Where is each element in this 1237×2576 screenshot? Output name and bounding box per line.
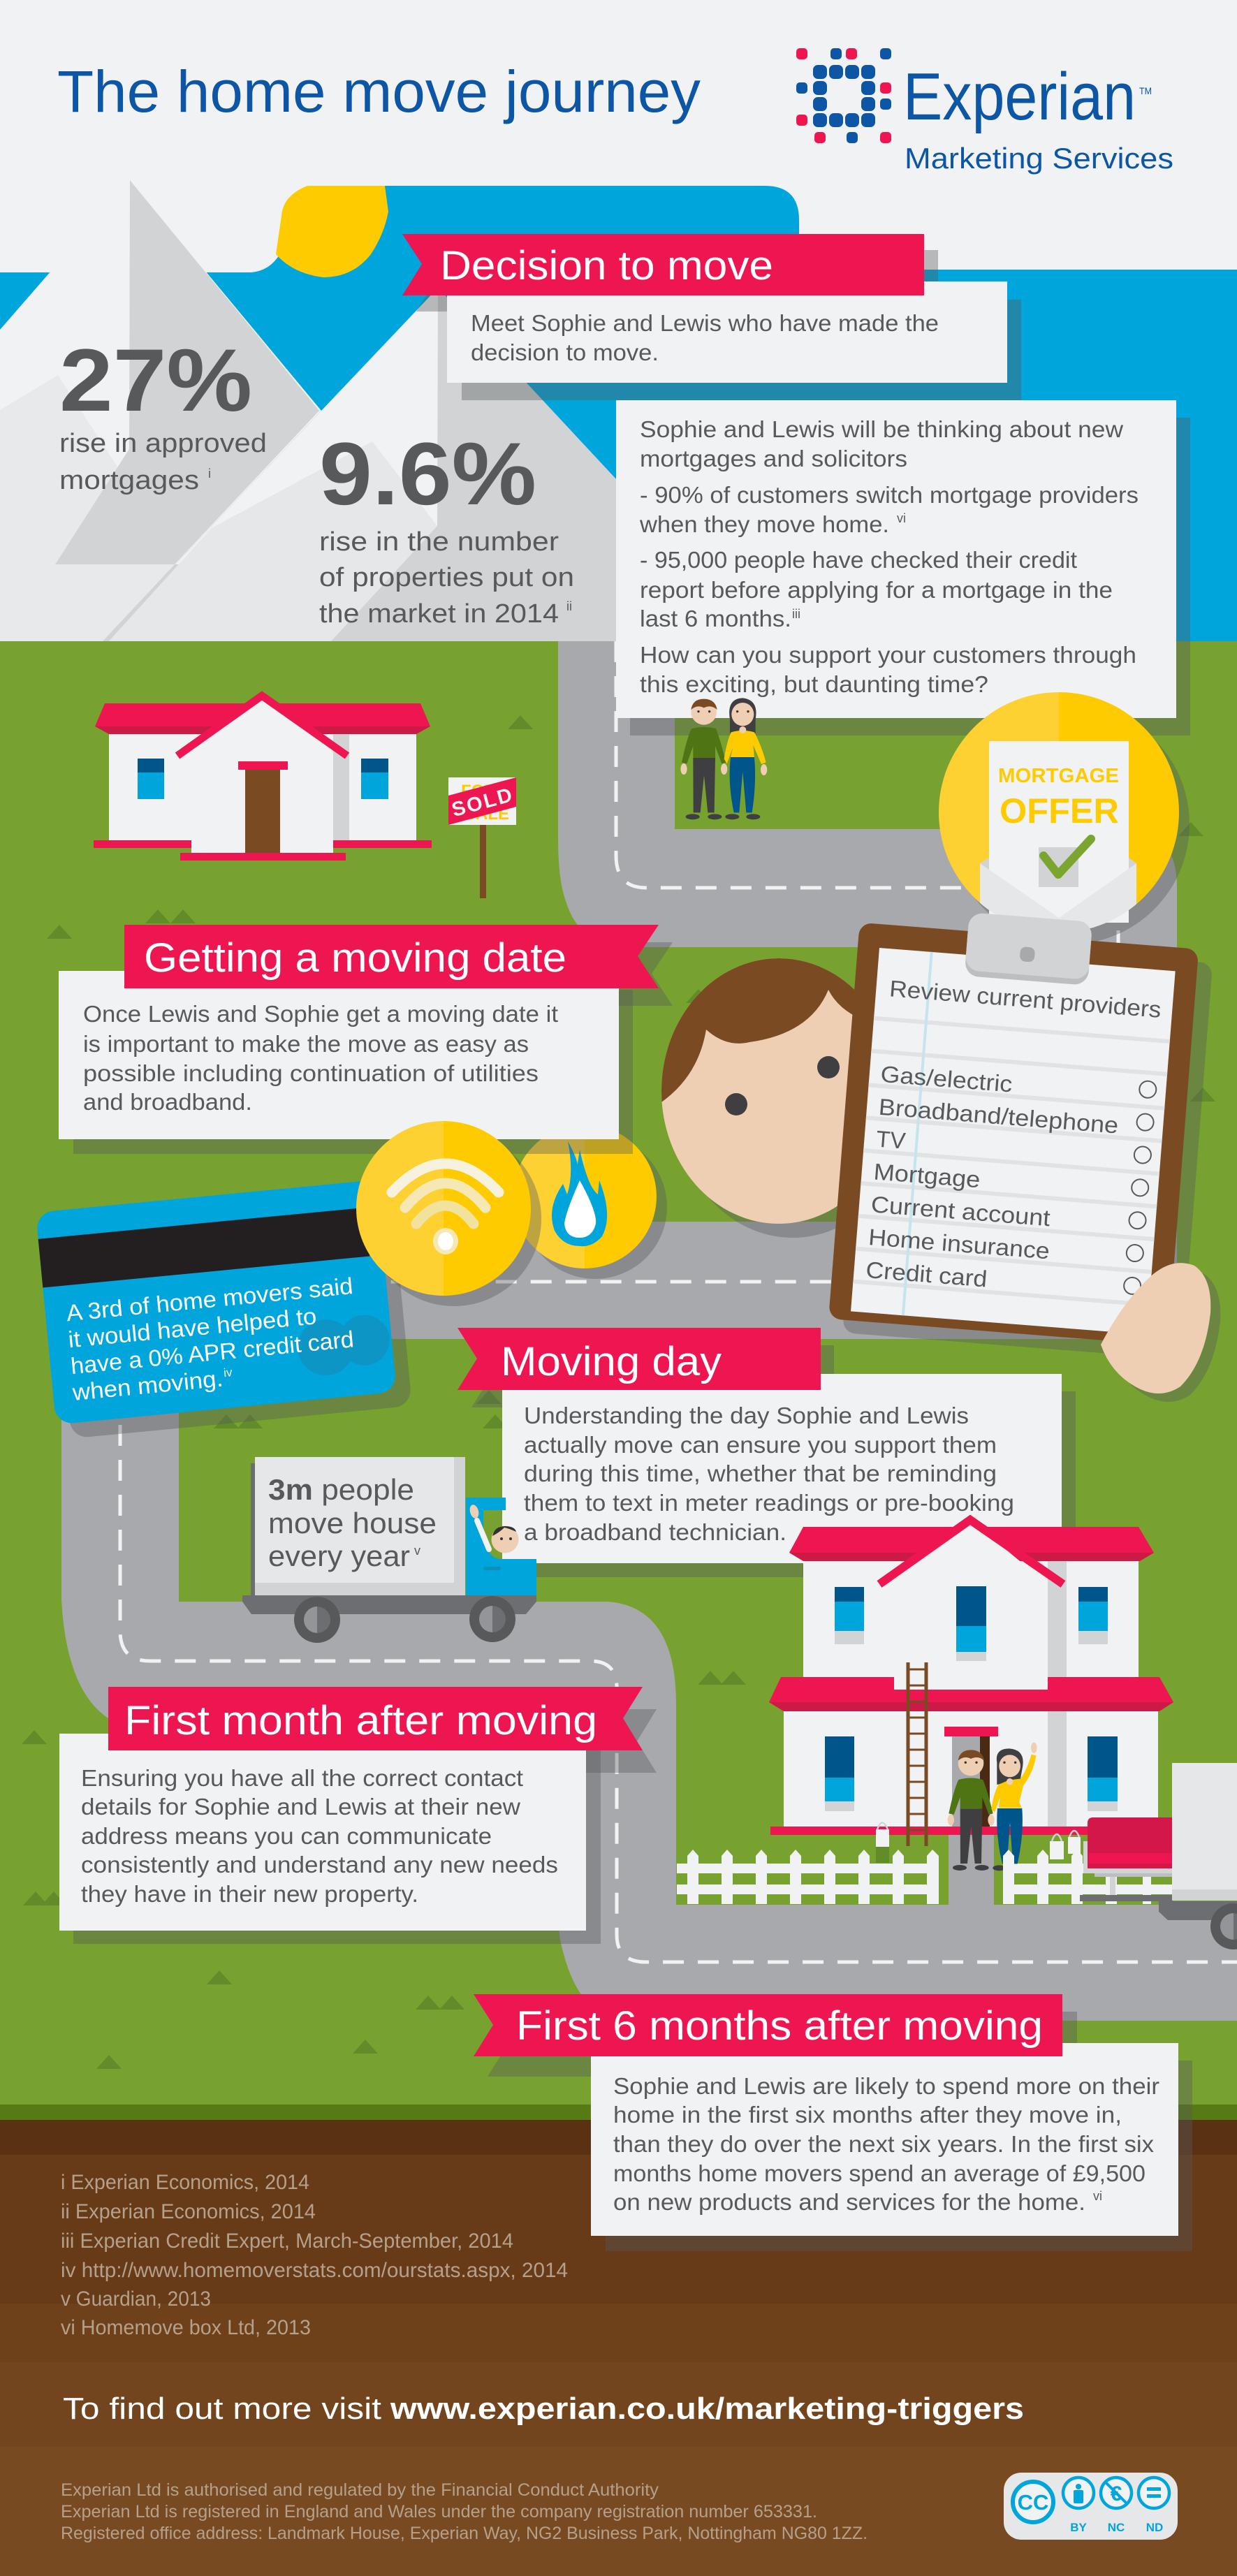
panel: moving day bbox=[458, 1328, 1076, 1577]
icon: removal truck with 3m stat: every year bbox=[268, 1539, 410, 1572]
card: 0% APR credit card: it would have helped to bbox=[67, 1303, 318, 1352]
clipboard: review current providers: Review current providers bbox=[888, 975, 1162, 1023]
panel: first 6 months after moving: vi bbox=[1093, 2189, 1102, 2203]
Sophie waving bbox=[991, 1743, 1037, 1871]
footnotes: i Experian Economics, 2014 bbox=[61, 2171, 309, 2194]
character: face looking at clipboard bbox=[661, 958, 855, 1238]
couple waving at new home bbox=[948, 1743, 1037, 1871]
panel: first 6 months after moving bbox=[474, 1994, 1192, 2251]
creative commons badge bbox=[1004, 2473, 1178, 2540]
legal text: Experian Ltd is authorised and regulated by the Financial Conduct Authority bbox=[61, 2480, 659, 2500]
call to action bbox=[63, 2392, 1024, 2426]
icon: removal truck with 3m stat: v bbox=[414, 1544, 420, 1558]
creative commons badge: ND bbox=[1146, 2521, 1163, 2534]
icon: sold sign: SOLD bbox=[449, 784, 516, 821]
clipboard: review current providers: Gas/electric bbox=[879, 1061, 1013, 1097]
panel: moving day: actually move can ensure you support them bbox=[524, 1432, 997, 1458]
panel: first 6 months after moving: months home movers spend an average of £9,500 bbox=[613, 2160, 1145, 2186]
panel: mortgages and solicitors: - 95,000 people have checked their credit bbox=[640, 547, 1077, 573]
panel: mortgages and solicitors: when they move home. bbox=[639, 511, 889, 537]
stat: 9.6%: the market in 2014 bbox=[319, 599, 559, 629]
call to action: www.experian.co.uk/marketing-triggers bbox=[390, 2392, 1024, 2426]
panel: moving day: during this time, whether that be reminding bbox=[524, 1461, 997, 1486]
icon: sold sign bbox=[448, 777, 516, 898]
clipboard: review current providers: Mortgage bbox=[872, 1158, 981, 1192]
panel: mortgages and solicitors: vi bbox=[897, 511, 906, 525]
panel: mortgages and solicitors: this exciting, but daunting time? bbox=[640, 671, 988, 697]
stat: 27%: i bbox=[208, 467, 211, 481]
logo dot matrix bbox=[796, 48, 891, 143]
panel: getting a moving date: possible including continuation of utilities bbox=[83, 1060, 539, 1086]
panel: moving day: Understanding the day Sophie and Lewis bbox=[524, 1403, 969, 1428]
legal text: Experian Ltd is registered in England and Wales under the company registration number 653331. bbox=[61, 2502, 817, 2522]
panel: first 6 months after moving: home in the first six months after they move in, bbox=[613, 2102, 1122, 2128]
icon: removal truck at right edge bbox=[1159, 1763, 1237, 1949]
panel: mortgages and solicitors bbox=[616, 400, 1190, 736]
banner: first month after moving bbox=[108, 1687, 643, 1750]
clipboard: review current providers: TV bbox=[875, 1126, 907, 1154]
ladder bbox=[908, 1662, 926, 1846]
panel: getting a moving date: Once Lewis and Sophie get a moving date it bbox=[83, 1001, 558, 1027]
banner: first 6 months after moving: First 6 months after moving bbox=[516, 2003, 1043, 2049]
card: 0% APR credit card: when moving. bbox=[71, 1365, 224, 1405]
panel: first month after moving: Ensuring you have all the correct contact bbox=[81, 1765, 523, 1791]
panel: moving day: a broadband technician. bbox=[524, 1519, 786, 1545]
stat: 9.6% bbox=[319, 424, 574, 629]
panel: getting a moving date: and broadband. bbox=[83, 1089, 252, 1115]
fence pickets in front of Sophie bbox=[1003, 1850, 1117, 1904]
creative commons badge: BY bbox=[1070, 2521, 1087, 2534]
stat: 27%: rise in approved bbox=[59, 429, 267, 458]
panel: mortgages and solicitors: Sophie and Lewis will be thinking about new bbox=[640, 416, 1123, 442]
banner: decision to move bbox=[402, 234, 924, 295]
stat: 9.6%: of properties put on bbox=[319, 563, 574, 592]
icon: sold sign: SALE bbox=[464, 805, 509, 824]
stat: 9.6%: rise in the number bbox=[319, 527, 559, 557]
stat: 27% bbox=[59, 330, 267, 495]
footnotes: vi Homemove box Ltd, 2013 bbox=[61, 2316, 311, 2339]
panel: mortgages and solicitors: - 90% of customers switch mortgage providers bbox=[640, 482, 1139, 508]
icon: wifi circle bbox=[356, 1121, 541, 1306]
logo: Experian Marketing Services: Marketing Services bbox=[905, 142, 1173, 175]
card: 0% APR credit card: iv bbox=[223, 1366, 233, 1380]
clipboard: review current providers bbox=[828, 912, 1213, 1359]
clipboard: review current providers: Current account bbox=[870, 1191, 1051, 1231]
sun bbox=[276, 186, 388, 277]
panel: decision to move intro: decision to move. bbox=[471, 339, 659, 365]
panel: first month after moving: details for Sophie and Lewis at their new bbox=[81, 1794, 520, 1820]
card: 0% APR credit card bbox=[36, 1178, 412, 1440]
mountains bbox=[0, 180, 767, 641]
clipboard: review current providers: Credit card bbox=[865, 1257, 988, 1292]
stat: 27%: mortgages bbox=[59, 466, 199, 495]
panel: first 6 months after moving: Sophie and Lewis are likely to spend more on their bbox=[613, 2073, 1159, 2099]
panel: getting a moving date bbox=[59, 925, 673, 1154]
stat: 9.6%: ii bbox=[566, 599, 572, 613]
white picket fence bbox=[677, 1850, 1172, 1904]
banner: first 6 months after moving bbox=[474, 1994, 1062, 2056]
road dashes bbox=[120, 641, 1237, 1962]
logo: Experian Marketing Services: TM bbox=[1139, 85, 1152, 96]
icon: mortgage offer bbox=[939, 692, 1190, 944]
panel: first 6 months after moving: than they do over the next six years. In the first six bbox=[613, 2131, 1155, 2157]
icon: mortgage offer: MORTGAGE bbox=[998, 765, 1119, 787]
icon: mortgage offer: OFFER bbox=[1000, 791, 1119, 830]
icon: removal truck with 3m stat: 3m people bbox=[268, 1473, 414, 1506]
banner: getting a moving date: Getting a moving date bbox=[144, 935, 566, 981]
banner: moving day bbox=[458, 1328, 821, 1390]
couple: Lewis and Sophie bbox=[680, 698, 767, 819]
panel: mortgages and solicitors: last 6 months. bbox=[640, 606, 791, 631]
footnotes: v Guardian, 2013 bbox=[61, 2288, 211, 2311]
footnotes: iii Experian Credit Expert, March-September, 2014 bbox=[61, 2230, 513, 2253]
stat: 9.6%: 9.6% bbox=[319, 424, 536, 523]
icon: removal truck with 3m stat: move house bbox=[268, 1507, 437, 1539]
ground: soil layers bbox=[0, 2105, 1237, 2576]
panel: first month after moving: address means you can communicate bbox=[81, 1823, 492, 1849]
creative commons badge: € bbox=[1111, 2482, 1122, 2505]
hand holding clipboard bbox=[1101, 1263, 1220, 1402]
panel: mortgages and solicitors: iii bbox=[792, 607, 800, 621]
legal text: Registered office address: Landmark House, Experian Way, NG2 Business Park, Nottingham NG80 1ZZ. bbox=[61, 2524, 868, 2543]
card: 0% APR credit card: have a 0% APR credit card bbox=[70, 1326, 355, 1379]
panel: mortgages and solicitors: How can you support your customers through bbox=[640, 642, 1136, 668]
sky bbox=[0, 186, 1237, 650]
panel: first month after moving: they have in their new property. bbox=[81, 1881, 418, 1907]
panel: mortgages and solicitors: mortgages and solicitors bbox=[640, 446, 907, 471]
grass tufts bbox=[22, 715, 1215, 2069]
clipboard clip bbox=[965, 912, 1092, 986]
icon: new family house bbox=[769, 1520, 1173, 1905]
banner: decision to move: Decision to move bbox=[440, 243, 773, 288]
panel: first 6 months after moving: on new products and services for the home. bbox=[613, 2189, 1085, 2215]
panel: first month after moving bbox=[59, 1687, 657, 1944]
ground: grass bbox=[0, 641, 1237, 2105]
footnotes: iv http://www.homemoverstats.com/ourstats.aspx, 2014 bbox=[61, 2259, 568, 2282]
clipboard: review current providers: Home insurance bbox=[868, 1224, 1051, 1264]
paint cans bbox=[876, 1823, 1081, 1863]
panel: getting a moving date: is important to make the move as easy as bbox=[83, 1031, 529, 1057]
stat: 27%: 27% bbox=[59, 330, 252, 430]
panel: moving day: them to text in meter readings or pre-booking bbox=[524, 1490, 1014, 1516]
panel: first month after moving: consistently and understand any new needs bbox=[81, 1852, 558, 1878]
panel: decision to move intro bbox=[402, 234, 1021, 400]
logo: Experian Marketing Services bbox=[796, 48, 1173, 175]
icon: sofa on truck tail lift bbox=[1080, 1817, 1173, 1901]
title: The home move journey bbox=[57, 59, 701, 124]
road bbox=[61, 641, 1237, 2021]
icon: small house for sale bbox=[94, 696, 432, 861]
icon: gas flame circle bbox=[513, 1125, 667, 1279]
Lewis bbox=[680, 699, 727, 819]
footnotes bbox=[61, 2171, 568, 2339]
Lewis bbox=[948, 1750, 995, 1871]
clipboard: review current providers: Broadband/telephone bbox=[878, 1094, 1120, 1139]
panel: mortgages and solicitors: report before applying for a mortgage in the bbox=[640, 577, 1113, 603]
call to action: To find out more visit bbox=[63, 2392, 381, 2426]
logo: Experian Marketing Services: Experian bbox=[903, 59, 1136, 134]
creative commons badge: CC bbox=[1018, 2490, 1048, 2515]
banner: first month after moving: First month after moving bbox=[124, 1698, 597, 1743]
banner: getting a moving date bbox=[124, 925, 659, 988]
legal text bbox=[61, 2480, 868, 2543]
icon: removal truck with 3m stat bbox=[242, 1457, 536, 1643]
icon: sold sign: FOR bbox=[461, 782, 497, 800]
banner: moving day: Moving day bbox=[501, 1339, 722, 1384]
Sophie bbox=[724, 698, 767, 819]
panel: decision to move intro: Meet Sophie and Lewis who have made the bbox=[471, 310, 939, 336]
creative commons badge: NC bbox=[1108, 2521, 1125, 2534]
footnotes: ii Experian Economics, 2014 bbox=[61, 2200, 316, 2223]
card: 0% APR credit card: A 3rd of home movers said bbox=[65, 1273, 354, 1326]
